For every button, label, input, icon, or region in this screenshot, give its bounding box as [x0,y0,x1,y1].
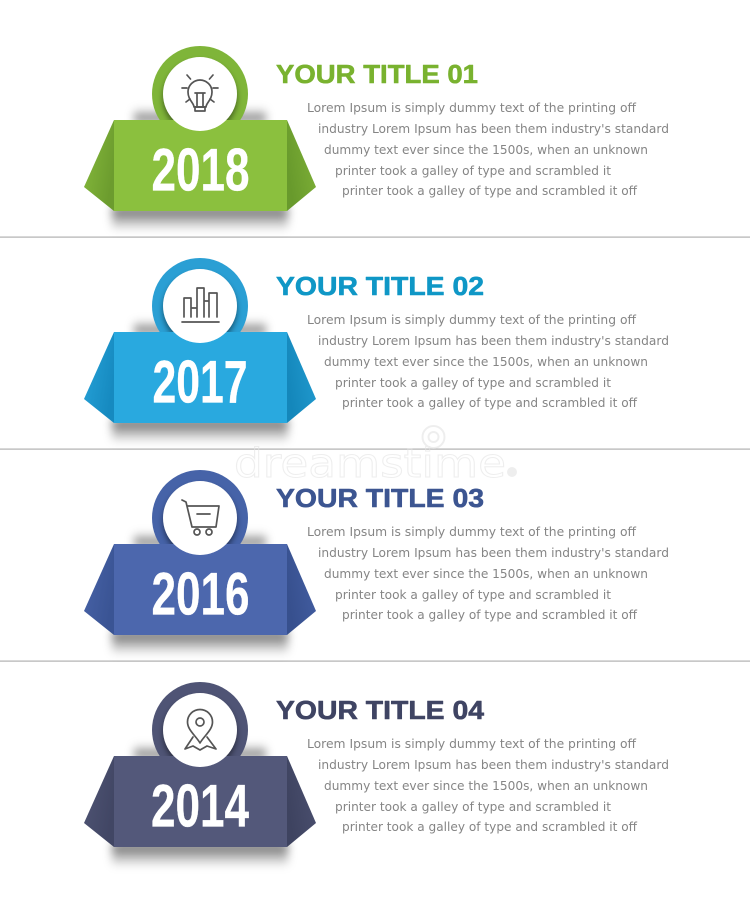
body text: printer took a galley of type and scrambled it off [342,396,638,411]
title: YOUR TITLE 04 [276,695,485,725]
body text: industry Lorem Ipsum has been them industry's standard [318,546,669,561]
icon: shopping cart [182,500,219,535]
front panel [114,332,287,423]
body text: dummy text ever since the 1500s, when an unknown [324,567,648,582]
title: YOUR TITLE 01 [276,59,478,89]
body text: printer took a galley of type and scrambled it off [342,608,638,623]
left flap [84,756,114,847]
watermark: dreamstime [234,441,506,487]
right flap [287,756,316,847]
body text: printer took a galley of type and scrambled it [335,164,611,179]
badge ring [152,46,248,142]
icon: light bulb [182,75,218,111]
body text: dummy text ever since the 1500s, when an unknown [324,355,648,370]
badge ring [152,470,248,566]
left flap [84,544,114,635]
body text [307,525,669,623]
title: YOUR TITLE 03 [276,483,484,513]
panel: 2014 [84,682,669,867]
body text: Lorem Ipsum is simply dummy text of the printing off [307,737,637,752]
icon: map pin [185,710,216,750]
year: 2017 [152,348,248,416]
body text: industry Lorem Ipsum has been them industry's standard [318,334,669,349]
right flap [287,544,316,635]
front panel [114,120,287,211]
panel: 2016 [84,470,669,655]
panel: 2017 [84,258,669,443]
badge ring [152,258,248,354]
watermark [234,426,517,487]
body text: dummy text ever since the 1500s, when an unknown [324,143,648,158]
white disc [163,269,237,343]
left flap [84,120,114,211]
body text: printer took a galley of type and scrambled it off [342,184,638,199]
panel: 2018 [84,46,669,231]
year: 2018 [152,136,250,204]
left flap [84,332,114,423]
badge: 2017 [84,258,316,443]
right flap [287,120,316,211]
body text: printer took a galley of type and scrambled it off [342,820,638,835]
white disc [163,481,237,555]
body text: printer took a galley of type and scrambled it [335,376,611,391]
year: 2014 [151,772,249,840]
body text [307,737,669,835]
body text: printer took a galley of type and scrambled it [335,588,611,603]
front panel [114,756,287,847]
body text: Lorem Ipsum is simply dummy text of the printing off [307,525,637,540]
title: YOUR TITLE 02 [276,271,484,301]
body text: industry Lorem Ipsum has been them industry's standard [318,758,669,773]
body text: Lorem Ipsum is simply dummy text of the printing off [307,313,637,328]
body text [307,101,669,199]
body text: industry Lorem Ipsum has been them industry's standard [318,122,669,137]
body text [307,313,669,411]
front panel [114,544,287,635]
badge: 2018 [84,46,316,231]
body text: printer took a galley of type and scrambled it [335,800,611,815]
year: 2016 [152,560,250,628]
badge ring [152,682,248,778]
badge: 2014 [84,682,316,867]
badge: 2016 [84,470,316,655]
body text: Lorem Ipsum is simply dummy text of the printing off [307,101,637,116]
icon: bar chart [182,288,219,322]
white disc [163,57,237,131]
right flap [287,332,316,423]
body text: dummy text ever since the 1500s, when an unknown [324,779,648,794]
white disc [163,693,237,767]
